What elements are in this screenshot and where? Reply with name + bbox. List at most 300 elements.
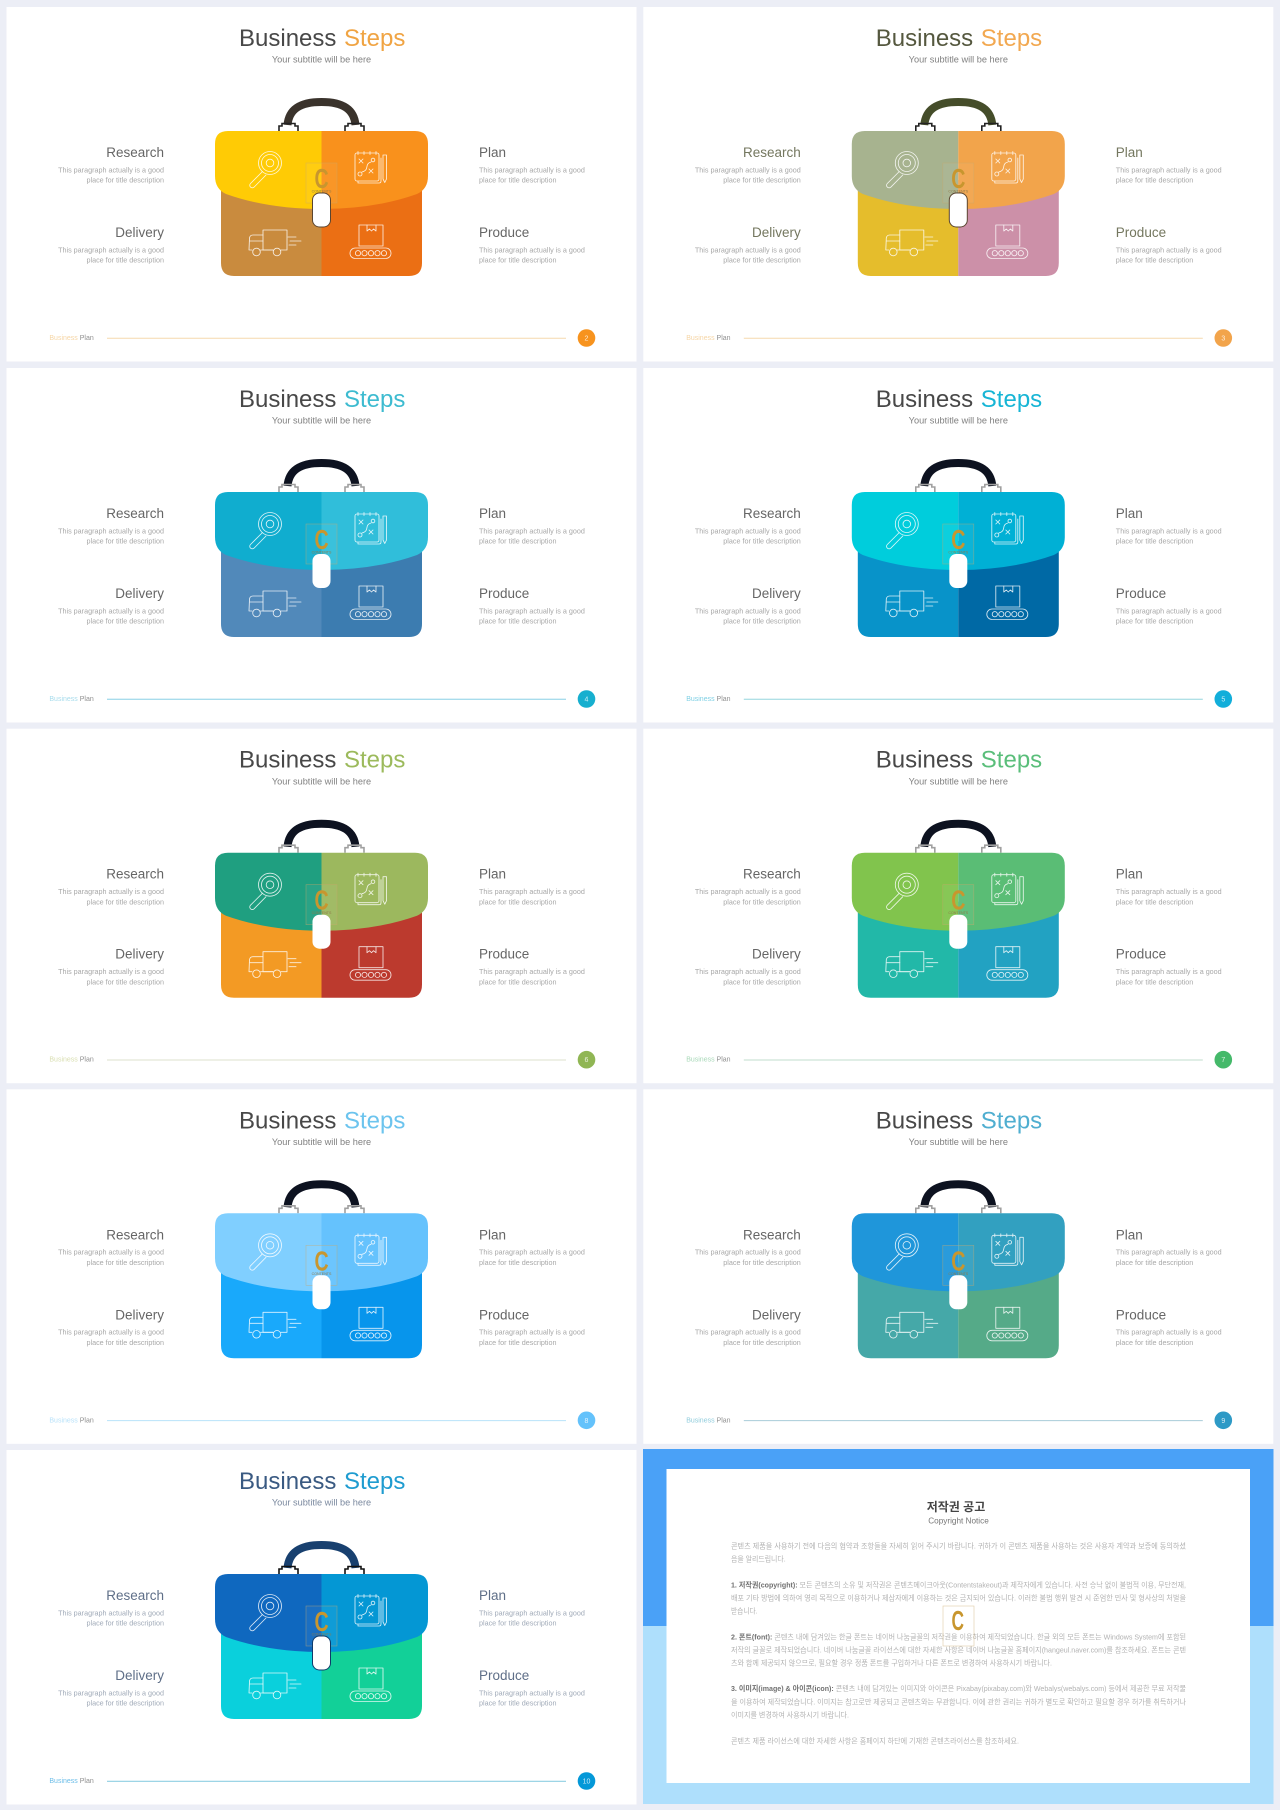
label: research	[695, 1227, 801, 1267]
label: plan	[479, 145, 585, 185]
label: delivery	[58, 225, 164, 265]
label: delivery	[695, 225, 801, 265]
footer: Business Plan	[686, 1057, 731, 1064]
briefcase	[852, 824, 1065, 998]
label: produce: This paragraph actually is a good	[479, 606, 585, 615]
label: delivery: Delivery	[115, 225, 164, 240]
blue frame top	[643, 1449, 1274, 1626]
body quadrants	[221, 902, 422, 998]
footer: Business Plan	[49, 335, 94, 342]
section 1 copyright: 배포 기타 방법에 의하여 영리 목적으로 이용하거나 제삼자에게 이용하는 것은 금지되어 있습니다. 이러한 불법 행위 발견 시 준엄한 민사 및 형사상의 처벌을	[731, 1592, 1186, 1602]
label: delivery: place for title description	[86, 256, 164, 265]
label: delivery: Delivery	[115, 1668, 164, 1683]
label: research: place for title description	[86, 537, 164, 546]
footer: 9	[1221, 1418, 1225, 1425]
label: research: This paragraph actually is a good	[58, 1248, 164, 1257]
label: produce: This paragraph actually is a good	[479, 967, 585, 976]
label: delivery: This paragraph actually is a good	[58, 967, 164, 976]
icon: plan notebook	[992, 152, 1023, 183]
footer	[686, 690, 1232, 708]
label: research: This paragraph actually is a good	[58, 887, 164, 896]
label: delivery: Delivery	[115, 947, 164, 962]
footer: Business Plan	[686, 1417, 731, 1424]
title: Steps	[981, 386, 1042, 413]
icon: conveyor box	[987, 586, 1028, 620]
title: Steps	[344, 1468, 405, 1495]
title: Business	[239, 1107, 336, 1134]
slide: page 4 steel blue	[6, 368, 636, 722]
label: produce	[1116, 225, 1222, 265]
label: delivery: This paragraph actually is a good	[58, 1688, 164, 1697]
label: plan: This paragraph actually is a good	[479, 165, 585, 174]
label: research	[58, 1588, 164, 1628]
body quadrants	[221, 1262, 422, 1358]
label: delivery: This paragraph actually is a good	[58, 245, 164, 254]
title	[239, 1107, 405, 1134]
footer	[686, 1412, 1232, 1429]
label: produce: This paragraph actually is a good	[1116, 967, 1222, 976]
footer: 3	[1221, 336, 1225, 342]
panel: copyright notice	[643, 1449, 1274, 1804]
footer: Business Plan	[49, 1057, 94, 1064]
label: plan: This paragraph actually is a good	[1116, 887, 1222, 896]
icon: conveyor box	[987, 225, 1028, 258]
label: produce: This paragraph actually is a good	[479, 1688, 585, 1697]
watermark	[306, 163, 337, 203]
label: delivery: This paragraph actually is a good	[695, 967, 801, 976]
handle	[288, 102, 356, 125]
watermark: CONTENTS	[948, 1272, 969, 1276]
title	[239, 1468, 405, 1495]
title: Business	[239, 747, 336, 774]
label: plan: Plan	[1116, 867, 1143, 882]
label: plan	[1116, 867, 1222, 906]
clasp	[312, 1275, 330, 1309]
label: research: Research	[106, 145, 164, 160]
icon: truck	[886, 591, 938, 617]
label: research: place for title description	[723, 897, 801, 906]
label: research: Research	[743, 867, 801, 882]
intro text: 콘텐츠 제품을 사용하기 전에 다음의 협약과 조항들을 자세히 읽어 주시기 바랍니다. 귀하가 이 콘텐츠 제품을 사용하는 것은 사용자 계약과 보증에 동의하셨	[731, 1541, 1186, 1551]
watermark	[306, 524, 337, 564]
section 3 image and icon	[731, 1683, 1186, 1719]
label: research: place for title description	[86, 1619, 164, 1628]
section 1 copyright: 1. 저작권(copyright): 모든 콘텐츠의 소유 및 저작권은 콘텐츠메이크아웃(Contentstakeout)과 제작자에게 있습니다. 사전 승낙 없이 불법적 이용, 무단전재,	[731, 1579, 1186, 1589]
briefcase	[215, 1184, 428, 1358]
briefcase	[215, 1545, 428, 1719]
label: produce: place for title description	[479, 256, 557, 265]
watermark: C	[314, 1246, 329, 1277]
label: produce: This paragraph actually is a good	[479, 1328, 585, 1337]
label: plan	[479, 506, 585, 546]
panel background	[643, 7, 1273, 362]
body quadrants	[221, 541, 422, 637]
label: plan: This paragraph actually is a good	[479, 1608, 585, 1617]
label: plan: Plan	[1116, 145, 1143, 160]
title: Steps	[344, 747, 405, 774]
label: delivery: This paragraph actually is a good	[695, 1328, 801, 1337]
label: research	[58, 867, 164, 906]
label: delivery	[695, 586, 801, 626]
clips	[279, 845, 364, 853]
closing note: 콘텐츠 제품 라이선스에 대한 자세한 사항은 홈페이지 하단에 기재한 콘텐츠라이선스를 참조하세요.	[731, 1735, 1019, 1745]
handle	[924, 463, 992, 486]
icon: plan notebook	[355, 1234, 386, 1265]
label: research	[58, 1227, 164, 1267]
footer: Business Plan	[49, 696, 94, 703]
slide: page 3 muted	[643, 7, 1273, 362]
icon: magnifier	[887, 512, 918, 549]
watermark: CONTENTS	[312, 190, 332, 194]
label: produce	[479, 586, 585, 626]
title: Steps	[344, 25, 405, 52]
label: produce: place for title description	[479, 617, 557, 626]
slide: page 9 teal blue	[643, 1089, 1273, 1444]
title	[876, 25, 1042, 52]
label: research	[695, 506, 801, 546]
label: produce: place for title description	[1116, 1338, 1193, 1347]
icon: conveyor box	[350, 586, 391, 620]
label: research: place for title description	[723, 537, 801, 546]
handle	[288, 1545, 356, 1568]
label: research: place for title description	[86, 176, 164, 185]
briefcase	[852, 463, 1065, 637]
clasp	[312, 915, 330, 949]
icon: conveyor box	[350, 1668, 391, 1702]
label: plan: Plan	[1116, 506, 1143, 521]
clips	[279, 484, 364, 492]
label: delivery: Delivery	[752, 947, 801, 962]
label: delivery: place for title description	[86, 1699, 164, 1708]
title: Business	[239, 25, 336, 52]
title: Business	[876, 25, 973, 52]
watermark	[306, 885, 337, 925]
subtitle: Your subtitle will be here	[909, 1137, 1008, 1147]
label: produce	[1116, 586, 1222, 626]
label: plan: This paragraph actually is a good	[479, 887, 585, 896]
label: research: Research	[743, 1227, 801, 1242]
icon: truck	[249, 1312, 301, 1338]
body quadrants	[858, 541, 1059, 637]
title: Business	[876, 386, 973, 413]
title: Steps	[344, 386, 405, 413]
section 2 font: 2. 폰트(font): 콘텐츠 내에 담겨있는 한글 폰트는 네이버 나눔글꼴의 저작권을 이용하여 제작되었습니다. 한글 외의 모든 폰트는 Windows System에 포함된	[731, 1631, 1186, 1641]
label: plan: place for title description	[1116, 897, 1193, 906]
slide: page 6 mixed	[6, 729, 636, 1083]
watermark: C	[314, 885, 329, 917]
label: produce: place for title description	[479, 1338, 557, 1347]
panel background	[6, 1089, 636, 1444]
title	[876, 747, 1042, 774]
flap quadrants	[852, 131, 1065, 209]
footer: 5	[1221, 696, 1225, 704]
label: research	[58, 506, 164, 546]
footer: Business Plan	[686, 696, 731, 703]
watermark	[943, 1605, 974, 1646]
label: plan: Plan	[479, 1588, 506, 1603]
label: plan	[479, 867, 585, 906]
footer: Business Plan	[49, 1778, 94, 1785]
watermark: C	[951, 885, 965, 917]
label: plan	[479, 1227, 585, 1267]
label: delivery: This paragraph actually is a good	[58, 606, 164, 615]
clips	[279, 1566, 364, 1574]
footer: 7	[1221, 1057, 1225, 1064]
label: delivery	[695, 1307, 801, 1347]
label: plan	[479, 1588, 585, 1628]
clips	[279, 1206, 364, 1213]
label: research: place for title description	[723, 176, 801, 185]
handle	[924, 1184, 992, 1207]
label: plan: place for title description	[1116, 537, 1193, 546]
icon: plan notebook	[992, 512, 1023, 544]
watermark: C	[951, 1246, 965, 1277]
footer: 4	[585, 696, 589, 704]
flap quadrants	[215, 131, 428, 209]
label: delivery	[58, 586, 164, 626]
label: research: This paragraph actually is a good	[58, 526, 164, 535]
footer	[49, 1772, 595, 1790]
watermark: CONTENTS	[312, 1632, 332, 1636]
clips	[916, 124, 1001, 131]
clasp	[312, 554, 330, 588]
subtitle: Your subtitle will be here	[909, 416, 1008, 426]
notice subheading: Copyright Notice	[928, 1517, 989, 1526]
icon: truck	[886, 1312, 938, 1338]
footer: Business Plan	[686, 335, 731, 342]
title	[239, 386, 405, 413]
label: research	[58, 145, 164, 185]
clasp	[949, 915, 967, 949]
label: delivery	[695, 947, 801, 986]
clasp	[949, 1275, 967, 1309]
label: plan: place for title description	[1116, 1258, 1193, 1267]
label: plan: This paragraph actually is a good	[479, 526, 585, 535]
briefcase	[215, 102, 428, 276]
label: research: Research	[106, 1227, 164, 1242]
slide: page 7 green	[643, 729, 1273, 1083]
footer	[686, 329, 1232, 347]
label: delivery: Delivery	[752, 1307, 801, 1322]
section 2 font: 저작의 글꼴로 제작되었습니다. 네이버 나눔글꼴 라이선스에 대한 자세한 사항은 네이버 나눔글꼴 홈페이지(hangeul.naver.com)를 참조하세요. 폰트는 콘텐	[731, 1644, 1186, 1654]
title: Business	[239, 386, 336, 413]
label: research: Research	[106, 506, 164, 521]
subtitle: Your subtitle will be here	[909, 55, 1008, 65]
label: produce: This paragraph actually is a good	[1116, 1328, 1222, 1337]
footer: 10	[583, 1778, 590, 1786]
title	[876, 386, 1042, 413]
footer: 6	[585, 1057, 589, 1064]
label: delivery: Delivery	[752, 225, 801, 240]
section 2 font: 츠와 함께 제공되지 않으므로, 필요할 경우 정품 폰트를 구입하거나 다른 폰트로 변경하여 사용하시기 바랍니다.	[731, 1658, 1052, 1668]
section 1 copyright	[731, 1579, 1186, 1616]
icon: plan notebook	[355, 152, 386, 183]
label: research: place for title description	[723, 1258, 801, 1267]
label: produce: place for title description	[479, 1699, 557, 1708]
label: delivery	[58, 1668, 164, 1708]
label: delivery: place for title description	[723, 977, 801, 986]
label: produce: place for title description	[479, 977, 557, 986]
label: research: place for title description	[86, 897, 164, 906]
icon: magnifier	[250, 512, 282, 549]
label: research: Research	[743, 506, 801, 521]
handle	[924, 824, 992, 847]
icon: plan notebook	[992, 1234, 1023, 1265]
icon: magnifier	[887, 873, 918, 910]
body quadrants	[221, 1623, 422, 1719]
watermark: C	[951, 164, 965, 195]
slide: page 8 sky blue	[6, 1089, 636, 1444]
label: delivery: place for title description	[723, 1338, 801, 1347]
watermark	[943, 1245, 974, 1285]
subtitle: Your subtitle will be here	[272, 776, 371, 786]
subtitle: Your subtitle will be here	[272, 55, 371, 65]
clips	[279, 124, 364, 131]
icon: plan notebook	[992, 873, 1023, 905]
section 2 font	[731, 1631, 1186, 1668]
label: plan: Plan	[479, 867, 506, 882]
label: produce	[479, 947, 585, 986]
section 1 copyright: 받습니다.	[731, 1606, 758, 1616]
watermark: C	[951, 525, 965, 556]
label: research	[695, 145, 801, 185]
icon: truck	[249, 1673, 301, 1699]
icon: conveyor box	[350, 947, 391, 980]
panel background	[643, 729, 1273, 1083]
label: research: This paragraph actually is a good	[695, 526, 801, 535]
footer	[49, 329, 595, 347]
label: plan: This paragraph actually is a good	[479, 1248, 585, 1257]
watermark	[306, 1606, 337, 1646]
label: delivery: place for title description	[723, 617, 801, 626]
label: research: This paragraph actually is a good	[58, 165, 164, 174]
label: plan	[1116, 145, 1222, 185]
title: Steps	[981, 747, 1042, 774]
label: produce: Produce	[1116, 586, 1166, 601]
flap quadrants	[852, 853, 1065, 931]
label: research: This paragraph actually is a good	[695, 887, 801, 896]
watermark: C	[314, 164, 329, 195]
label: produce: place for title description	[1116, 977, 1193, 986]
flap quadrants	[852, 1213, 1065, 1291]
label: produce	[1116, 947, 1222, 986]
clips	[916, 1206, 1001, 1213]
watermark	[943, 885, 974, 925]
label: delivery: This paragraph actually is a good	[695, 245, 801, 254]
label: plan: place for title description	[479, 1619, 557, 1628]
subtitle: Your subtitle will be here	[909, 776, 1008, 786]
icon: truck	[886, 230, 938, 256]
label: plan: place for title description	[479, 537, 557, 546]
label: plan: Plan	[479, 145, 506, 160]
label: produce: place for title description	[1116, 256, 1193, 265]
label: delivery: Delivery	[115, 586, 164, 601]
watermark: C	[314, 1607, 329, 1638]
slide: page 10 navy	[6, 1450, 636, 1804]
label: research: This paragraph actually is a good	[695, 1248, 801, 1257]
body quadrants	[221, 180, 422, 276]
label: delivery	[58, 947, 164, 986]
briefcase	[852, 1184, 1065, 1358]
label: plan: This paragraph actually is a good	[1116, 526, 1222, 535]
label: plan: place for title description	[479, 1258, 557, 1267]
section 3 image and icon: 이미지를 변경하여 사용하시기 바랍니다.	[731, 1709, 849, 1719]
flap quadrants	[215, 1213, 428, 1291]
title: Business	[876, 1107, 973, 1134]
panel background	[643, 368, 1273, 722]
label: research: place for title description	[86, 1258, 164, 1267]
label: delivery: place for title description	[86, 977, 164, 986]
icon: magnifier	[887, 1234, 918, 1270]
label: delivery: This paragraph actually is a good	[695, 606, 801, 615]
label: produce	[479, 225, 585, 265]
watermark: C	[314, 525, 329, 556]
label: produce: This paragraph actually is a good	[479, 245, 585, 254]
flap quadrants	[215, 1574, 428, 1652]
label: delivery: Delivery	[752, 586, 801, 601]
icon: conveyor box	[350, 1307, 391, 1341]
body quadrants	[858, 1262, 1059, 1358]
icon: magnifier	[250, 873, 282, 910]
label: produce: Produce	[1116, 1307, 1166, 1322]
white sheet	[666, 1469, 1250, 1783]
clips	[916, 484, 1001, 492]
watermark: CONTENTS	[312, 550, 332, 554]
blue frame bottom	[643, 1626, 1274, 1804]
body quadrants	[858, 902, 1059, 998]
watermark: CONTENTS	[948, 190, 969, 194]
label: plan: Plan	[479, 506, 506, 521]
flap quadrants	[852, 492, 1065, 570]
icon: magnifier	[250, 1234, 282, 1270]
icon: truck	[886, 952, 938, 978]
clasp	[312, 1636, 330, 1670]
footer	[686, 1051, 1232, 1068]
icon: truck	[249, 952, 301, 978]
footer	[49, 1412, 595, 1429]
title: Steps	[981, 1107, 1042, 1134]
watermark: CONTENTS	[948, 911, 969, 915]
title: Steps	[981, 25, 1042, 52]
watermark: CONTENTS	[312, 1272, 332, 1276]
body quadrants	[858, 180, 1059, 276]
icon: magnifier	[250, 152, 282, 188]
footer	[49, 690, 595, 708]
notice heading: 저작권 공고	[927, 1499, 985, 1514]
label: research: This paragraph actually is a good	[58, 1608, 164, 1617]
footer: Business Plan	[49, 1417, 94, 1424]
label: produce: This paragraph actually is a good	[1116, 245, 1222, 254]
briefcase	[215, 824, 428, 998]
clasp	[949, 554, 967, 588]
icon: plan notebook	[355, 512, 386, 544]
watermark: CONTENTS	[948, 550, 969, 554]
icon: magnifier	[250, 1594, 282, 1631]
watermark	[306, 1245, 337, 1285]
subtitle: Your subtitle will be here	[272, 1498, 371, 1508]
title	[239, 747, 405, 774]
watermark: CONTENTS	[312, 911, 332, 915]
title	[876, 1107, 1042, 1134]
label: produce	[1116, 1307, 1222, 1347]
clips	[916, 845, 1001, 853]
clasp	[312, 193, 330, 227]
label: produce: Produce	[479, 1307, 529, 1322]
section 3 image and icon: 을 이용하여 제작되었습니다. 이미지는 참고로만 제공되고 콘텐츠와는 무관합니다. 이에 관한 권리는 귀하가 별도로 확인하고 필요할 경우 허가를 취득하거나	[731, 1696, 1186, 1706]
label: plan	[1116, 1227, 1222, 1267]
icon: conveyor box	[350, 225, 391, 258]
footer: 8	[585, 1418, 589, 1425]
